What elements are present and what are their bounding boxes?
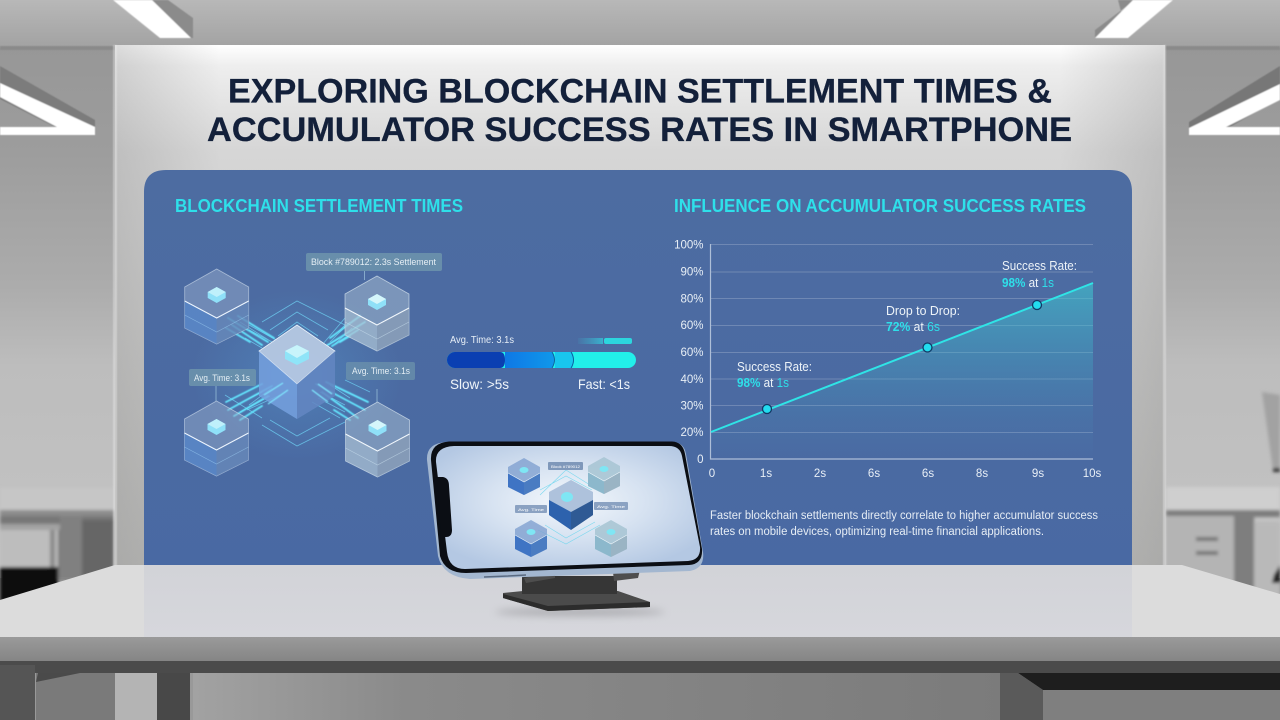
mini label left: Avg. Time [518,507,545,512]
y axis labels: 20% [680,427,704,439]
glowing data streams [226,316,368,420]
y axis labels: 40% [680,374,704,386]
data point: 9s [1032,300,1042,310]
gauge label: average time: Avg. Time: 3.1s [450,334,514,346]
summary text [710,510,1098,538]
axes [710,244,1093,459]
x axis labels: 9s [1032,468,1044,480]
block: top left [185,269,249,344]
blockchain network diagram [184,253,442,477]
block: centre [259,325,335,419]
right room wall [1165,48,1280,578]
label: average time right [346,362,415,402]
callout: drop: Drop to Drop: [886,304,960,318]
stand [503,570,650,611]
gauge label: fast: Fast: <1s [578,376,630,392]
x axis labels: 2s [814,468,826,480]
table front edge [0,637,1280,661]
callout: success rate high: 98% at 1s [1002,276,1054,290]
title: ACCUMULATOR SUCCESS RATES IN SMARTPHONE [207,111,1072,149]
mini block bottom right [595,520,627,557]
label: block settlement [306,253,442,280]
x axis labels: 6s [868,468,880,480]
table top [0,565,1280,637]
under-table right cabinet [1000,673,1280,720]
mini blockchain diagram on screen [508,457,628,557]
data point: 1s [762,404,772,414]
y axis labels: 100% [674,240,704,252]
x axis labels: 6s [922,468,934,480]
heading: influence on accumulator success rates: INFLUENCE ON ACCUMULATOR SUCCESS RATES [674,196,1086,216]
ceiling [0,0,1280,48]
callout: success rate low [737,360,812,390]
summary text: rates on mobile devices, optimizing real-time financial applications. [710,526,1044,538]
left wall light [0,66,95,135]
label: average time right: Avg. Time: 3.1s [352,366,410,377]
line chart: success rate vs settlement time [674,240,1102,480]
heading: blockchain settlement times: BLOCKCHAIN SETTLEMENT TIMES [175,196,463,216]
left desk [0,488,114,602]
callout: success rate low: 98% at 1s [737,376,789,390]
y axis labels: 30% [680,400,704,412]
y axis labels [674,240,704,466]
left room wall [0,48,116,578]
block: bottom left [184,401,248,476]
x axis labels: 0 [709,468,715,480]
y axis labels: 60% [680,347,704,359]
stand shadow [495,608,665,616]
gauge bar [447,352,636,368]
main blue panel [144,170,1132,575]
circuit connection lines [225,301,370,446]
y axis labels: 60% [680,320,704,332]
phone body [427,442,703,579]
gauge label: slow: Slow: >5s [450,376,509,392]
block: top right [345,276,409,351]
callout: success rate high: Success Rate: [1002,259,1077,273]
area under line [711,283,1093,459]
right wall light [1189,66,1280,135]
x axis labels: 8s [976,468,988,480]
mini label top: Block #789012 [551,464,581,469]
trend line [711,283,1093,432]
x axis labels: 10s [1083,468,1102,480]
summary text: Faster blockchain settlements directly correlate to higher accumulator success [710,510,1098,522]
under-table left [0,665,1043,720]
y axis labels: 80% [680,294,704,306]
network glow [192,290,402,460]
phone buttons [484,575,526,577]
label: average time left [189,369,256,401]
right desk and monitor [1166,392,1280,604]
settlement speed gauge [447,334,636,392]
callout: success rate high [1002,259,1077,290]
x axis labels: 1s [760,468,772,480]
smartphone on stand [427,442,703,616]
data point: 6s [923,343,932,352]
callout: drop: 72% at 6s [886,320,940,334]
phone notch [437,477,452,537]
mini block centre [549,480,593,530]
title [207,72,1072,149]
block: bottom right [346,402,410,477]
white table [0,565,1280,720]
mini label right: Avg. Time [597,504,626,509]
mini block bottom left [515,520,547,557]
mini block top right [588,457,620,494]
callout: success rate low: Success Rate: [737,360,812,374]
ceiling lights [113,0,1173,38]
panel reflection on table [144,565,1132,637]
callout: drop [886,304,960,334]
label: block settlement: Block #789012: 2.3s Settlement [311,257,436,268]
phone screen [436,446,700,569]
mini block top left [508,458,540,495]
label: average time left: Avg. Time: 3.1s [194,373,250,384]
x axis labels [709,468,1102,480]
title: EXPLORING BLOCKCHAIN SETTLEMENT TIMES & [228,72,1052,110]
mini indicator bar [578,338,632,344]
y axis labels: 0 [697,454,704,466]
y axis labels: 90% [680,266,704,278]
grid lines [711,244,1093,432]
back wall [113,45,1166,575]
